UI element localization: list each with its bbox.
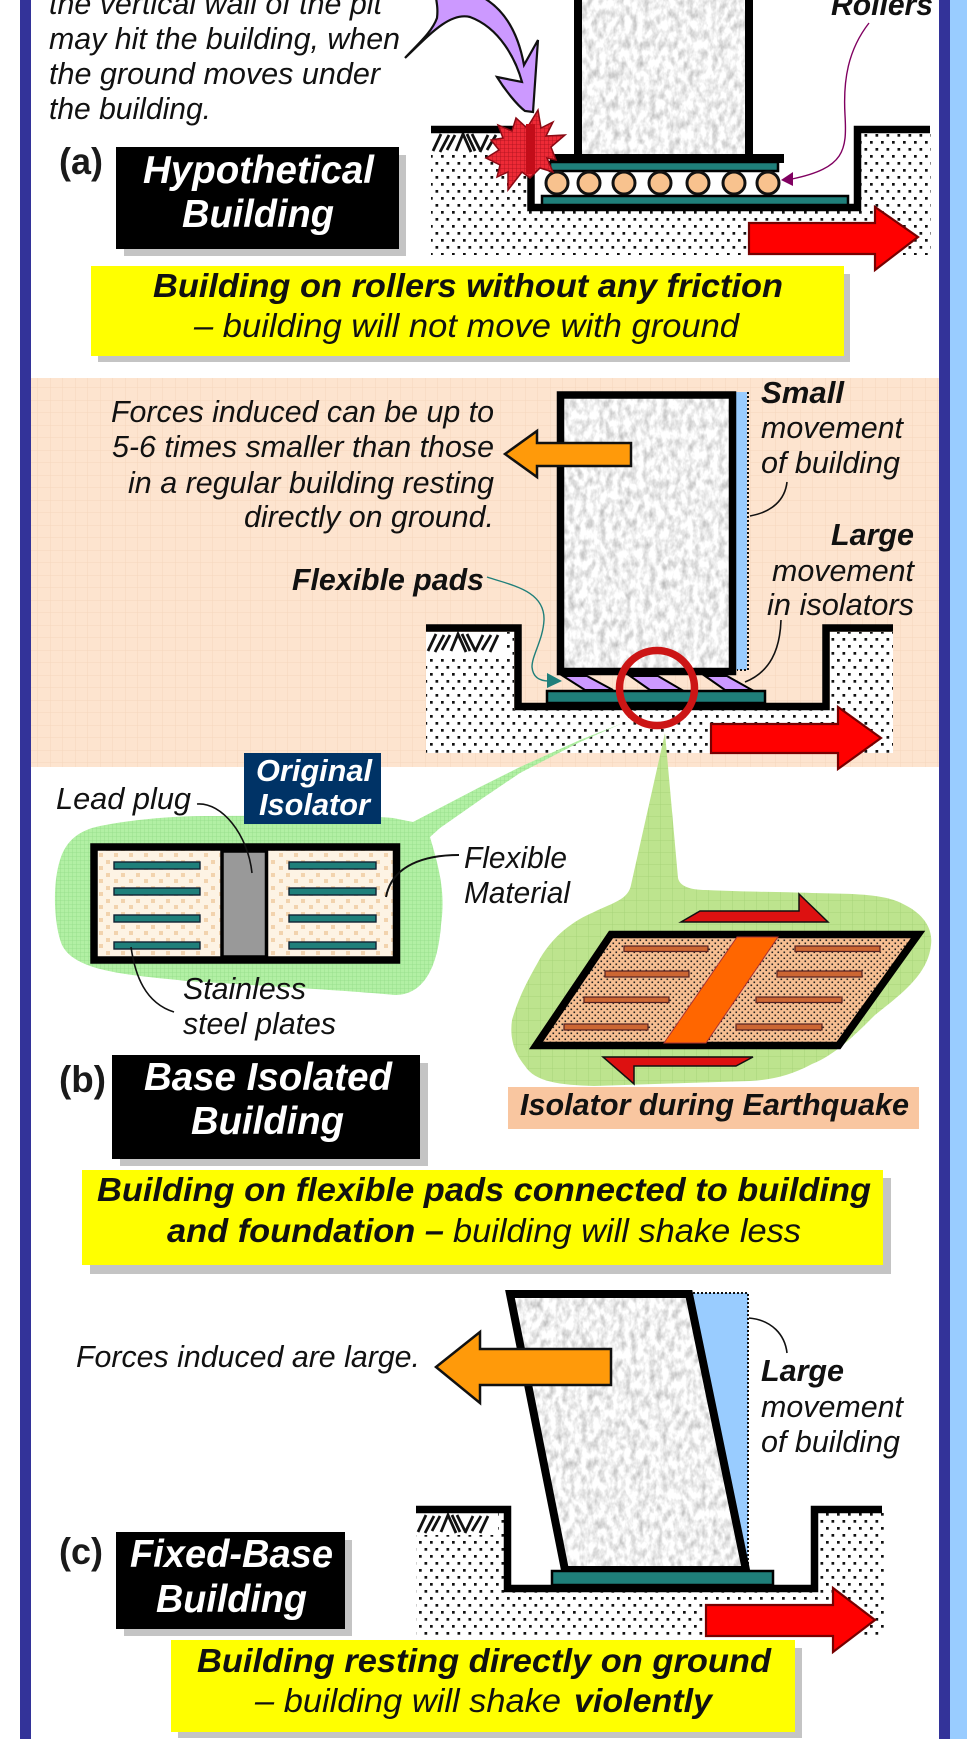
isolator detail: original — [55, 723, 623, 1041]
label (b): (b) — [59, 1059, 106, 1100]
arrow: reduced force — [505, 431, 631, 477]
label: large movement: in isolators — [767, 588, 914, 622]
callout: flexible pads: building will shake less — [453, 1212, 801, 1249]
label: stainless steel plates: steel plates — [183, 1007, 336, 1041]
label: rollers — [781, 0, 933, 186]
arrow: shear top — [681, 894, 828, 922]
callout: resting directly on ground: violently — [574, 1682, 714, 1719]
label: large movement: Large — [761, 1354, 844, 1388]
callout: rollers without friction — [91, 266, 850, 362]
heading: fixed-base building: Building — [156, 1578, 307, 1621]
deformed isolator — [536, 934, 918, 1046]
text: forces induced smaller — [111, 395, 494, 534]
label: flexible pads: Flexible pads — [292, 563, 484, 597]
label (c): (c) — [59, 1531, 103, 1572]
rollers — [546, 172, 779, 194]
label: stainless steel plates — [131, 947, 336, 1041]
heading: base isolated building: Building — [191, 1100, 344, 1143]
label: small movement: movement — [761, 411, 905, 445]
label: large movement: movement — [761, 1390, 905, 1424]
heading: fixed-base building: Fixed-Base — [130, 1533, 333, 1576]
foundation plate — [542, 196, 848, 205]
base plate — [552, 1571, 773, 1585]
arrow: ground movement — [749, 207, 918, 270]
heading: base isolated building — [112, 1055, 428, 1166]
building on rollers — [550, 0, 784, 171]
callout: flexible pads: Building on flexible pads connected to building — [97, 1171, 871, 1208]
heading: hypothetical building: Hypothetical — [143, 149, 375, 192]
text: forces are large: Forces induced are large. — [76, 1340, 420, 1374]
caption: isolator during earthquake: Isolator during Earthquake — [520, 1088, 909, 1122]
label: small movement — [750, 376, 905, 516]
arrow: ground movement — [706, 1588, 875, 1652]
callout bubble — [511, 733, 931, 1086]
ground with pit — [426, 628, 893, 753]
callout: resting directly on ground: Building resting directly on ground — [197, 1642, 772, 1679]
label: large movement: of building — [761, 1425, 900, 1459]
steel plates — [114, 862, 376, 949]
movement shade — [689, 1293, 748, 1570]
isolator base plate — [547, 691, 765, 703]
label: stainless steel plates: Stainless — [183, 972, 306, 1006]
ground with pit — [416, 1510, 884, 1636]
callout: flexible pads — [82, 1170, 891, 1274]
callout bubble — [55, 723, 623, 995]
panel: (b) base isolated building — [31, 376, 939, 1274]
label: flexible material: Material — [464, 876, 571, 910]
callout: resting directly on ground — [171, 1640, 802, 1738]
label (a): (a) — [59, 141, 103, 182]
callout: rollers without friction: Building on rollers without any friction — [153, 267, 783, 304]
text: forces induced smaller: 5-6 times smaller than those — [112, 430, 494, 464]
flexible pads — [563, 676, 752, 690]
heading: base isolated building: Base Isolated — [144, 1056, 393, 1099]
callout: resting directly on ground: – building will shake — [254, 1682, 561, 1719]
label: flexible pads — [292, 563, 562, 688]
heading: hypothetical building — [116, 147, 406, 256]
text: forces induced smaller: directly on ground. — [244, 500, 494, 534]
deformed plates — [564, 946, 880, 1030]
callout: flexible pads: and foundation – — [167, 1212, 444, 1249]
heading: original isolator — [244, 753, 381, 824]
ground with pit — [431, 130, 931, 255]
text: wall may hit building — [49, 0, 400, 126]
isolator body — [94, 847, 396, 960]
heading: original isolator: Isolator — [259, 788, 372, 822]
text: wall may hit building: the ground moves under — [49, 57, 382, 91]
label: flexible material: Flexible — [464, 841, 567, 875]
page frame right border — [939, 0, 967, 1739]
arrow: wall hitting building — [405, 0, 538, 112]
movement shade — [736, 392, 748, 670]
building — [560, 395, 733, 672]
page frame left border — [20, 0, 31, 1739]
label: large movement: movement — [772, 554, 916, 588]
label: large movement: Large — [831, 518, 914, 552]
tilted building — [510, 1294, 746, 1570]
text: forces induced smaller: Forces induced can be up to — [111, 395, 494, 429]
panel: (c) fixed-base building — [59, 1293, 905, 1738]
heading: fixed-base building — [116, 1532, 352, 1636]
text: forces induced smaller: in a regular building resting — [128, 466, 494, 500]
arrow: ground movement — [711, 707, 881, 769]
label: small movement: of building — [761, 446, 900, 480]
label: small movement: Small — [761, 376, 845, 410]
label: lead plug — [56, 782, 252, 873]
red circle highlight — [620, 650, 694, 726]
heading: original isolator: Original — [256, 754, 373, 788]
text: wall may hit building: may hit the building, when — [49, 22, 400, 56]
callout: rollers without friction: – building will not move with ground — [193, 307, 741, 344]
label: lead plug: Lead plug — [56, 782, 191, 816]
peach background — [31, 378, 939, 767]
arrow: shear bottom — [603, 1057, 753, 1084]
isolator detail: during earthquake — [508, 733, 931, 1129]
label: large movement — [749, 1318, 905, 1459]
text: wall may hit building: the building. — [49, 92, 211, 126]
arrow: large force — [436, 1332, 611, 1403]
impact burst — [486, 110, 565, 190]
panel: (a) hypothetical building — [49, 0, 933, 362]
label: large movement — [745, 518, 916, 682]
heading: hypothetical building: Building — [182, 193, 334, 236]
label: flexible material — [386, 841, 571, 910]
